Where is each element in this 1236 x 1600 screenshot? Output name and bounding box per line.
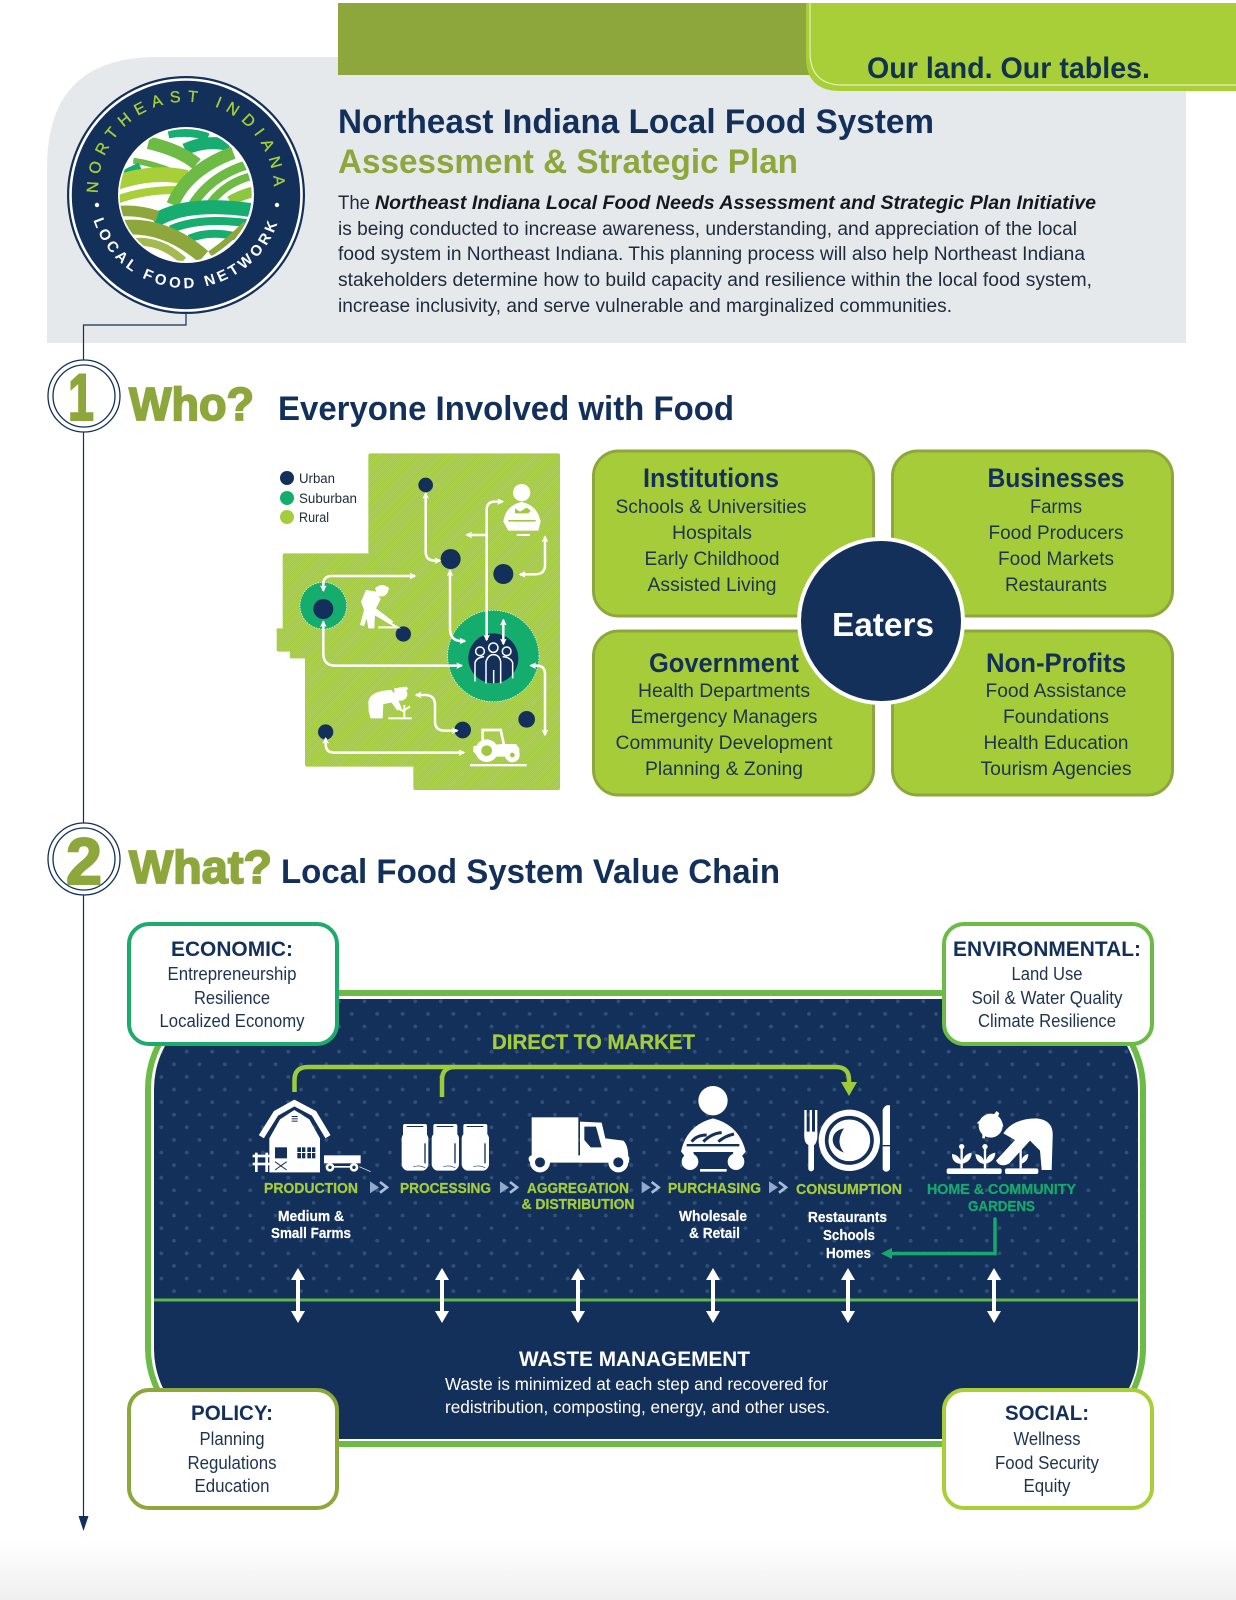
- icon: person with basket: [503, 484, 541, 536]
- legend: Suburban: [299, 491, 357, 506]
- panel: businesses: Food Markets: [998, 549, 1114, 570]
- waste management text: Waste is minimized at each step and recovered for: [445, 1374, 828, 1394]
- callout: social: SOCIAL:: [1005, 1402, 1089, 1425]
- panel: government: Planning & Zoning: [645, 759, 803, 780]
- waste management text: [445, 1348, 830, 1417]
- section 1 number: 1: [68, 360, 94, 434]
- title: Assessment & Strategic Plan: [338, 143, 798, 181]
- icon: jars: [402, 1124, 489, 1171]
- callout: policy: Planning: [200, 1429, 264, 1449]
- intro text: [338, 193, 1096, 317]
- flow arrows: [323, 493, 545, 753]
- step: aggregation label: & DISTRIBUTION: [522, 1197, 634, 1213]
- panel: non-profits: Health Education: [984, 733, 1128, 754]
- direct to market arrow: [294, 1067, 857, 1097]
- section 1 heading: Everyone Involved with Food: [278, 390, 734, 428]
- panel: non-profits: Non-Profits: [986, 648, 1126, 678]
- step: production labels: Small Farms: [271, 1226, 351, 1242]
- panel: government: Government: [649, 648, 799, 678]
- step: consumption labels: CONSUMPTION: [796, 1182, 902, 1198]
- step: consumption labels: Homes: [826, 1246, 871, 1262]
- timeline line: [84, 314, 186, 1520]
- urban dots: [313, 478, 535, 740]
- section 2 heading: [129, 841, 780, 893]
- panel: businesses: Restaurants: [1005, 575, 1107, 596]
- step: aggregation label: AGGREGATION: [527, 1181, 629, 1197]
- panel: non-profits: Foundations: [1003, 707, 1109, 728]
- callout: environmental: Land Use: [1012, 964, 1082, 984]
- step: processing label: PROCESSING: [400, 1181, 491, 1197]
- title: Northeast Indiana Local Food System: [338, 103, 934, 141]
- icon: plate and cutlery: [804, 1105, 890, 1172]
- callout: economic: Localized Economy: [160, 1011, 304, 1031]
- step: production labels: PRODUCTION: [264, 1181, 358, 1197]
- logo ring text: NORTHEAST INDIANA: [86, 90, 285, 192]
- panel: government: Emergency Managers: [630, 707, 818, 728]
- callout: policy: Education: [194, 1476, 270, 1496]
- timeline arrowhead: [78, 1516, 88, 1531]
- step: home and community gardens label: [927, 1182, 1076, 1215]
- arrow: gardens to homes: [881, 1219, 995, 1259]
- eaters circle: [797, 537, 965, 705]
- step: production labels: Medium &: [278, 1209, 345, 1225]
- section 2 number: [48, 823, 120, 898]
- panel: non-profits: [892, 631, 1172, 795]
- section 1 number: [48, 360, 120, 434]
- callout: social: Equity: [1024, 1476, 1070, 1496]
- panel: institutions: Institutions: [643, 463, 779, 493]
- tagline tab: [806, 3, 1236, 91]
- panel: value chain: [148, 993, 1143, 1444]
- tagline tab: Our land. Our tables.: [867, 52, 1150, 85]
- intro text: stakeholders determine how to build capacity and resilience within the local food system,: [338, 270, 1092, 291]
- eaters circle: Eaters: [832, 606, 934, 643]
- section 1 heading: [129, 378, 734, 430]
- regional map: [277, 453, 560, 790]
- logo ring text: [86, 90, 285, 288]
- legend: [280, 471, 357, 525]
- step: purchasing labels: Wholesale: [679, 1209, 747, 1225]
- header olive bar: [338, 3, 818, 75]
- callout: economic: Entrepreneurship: [168, 964, 296, 984]
- waste management text: redistribution, composting, energy, and other uses.: [445, 1397, 830, 1417]
- stakeholder groups: [594, 451, 1172, 795]
- section 1 heading: Who?: [129, 378, 254, 430]
- callout: social: [944, 1390, 1152, 1508]
- section 2 heading: Local Food System Value Chain: [281, 853, 780, 891]
- section 2 heading: What?: [129, 841, 272, 893]
- step: purchasing labels: PURCHASING: [668, 1181, 761, 1197]
- arrows: links to waste management: [291, 1268, 1001, 1323]
- step: purchasing labels: [668, 1181, 761, 1242]
- logo: [67, 76, 305, 314]
- panel: institutions: Assisted Living: [648, 575, 776, 596]
- legend: Urban: [299, 471, 335, 486]
- suburban circles: [300, 582, 539, 702]
- panel: institutions: Schools & Universities: [616, 497, 806, 518]
- chain step chevrons: [370, 1181, 786, 1193]
- intro text: The: [338, 193, 370, 214]
- callout: social: Food Security: [995, 1453, 1099, 1473]
- callout: economic: Resilience: [194, 988, 270, 1008]
- panel: non-profits: Food Assistance: [986, 681, 1126, 702]
- panel: institutions: Hospitals: [672, 523, 752, 544]
- callout: environmental: Soil & Water Quality: [972, 988, 1122, 1008]
- icon: bending gardener: [368, 687, 412, 719]
- intro text: is being conducted to increase awareness, understanding, and appreciation of the local: [338, 219, 1077, 240]
- callout: policy: POLICY:: [191, 1402, 273, 1425]
- logo fields: [117, 132, 255, 261]
- callout: environmental: ENVIRONMENTAL:: [953, 938, 1141, 961]
- legend: Rural: [299, 510, 329, 525]
- header panel: [47, 3, 1236, 343]
- panel: businesses: Businesses: [988, 463, 1124, 493]
- panel: institutions: Early Childhood: [644, 549, 780, 570]
- step: consumption labels: Schools: [823, 1228, 875, 1244]
- step: consumption labels: Restaurants: [808, 1210, 887, 1226]
- title: [338, 103, 934, 181]
- icon: delivery truck: [529, 1117, 629, 1172]
- callout: environmental: [944, 924, 1152, 1044]
- panel: government: [594, 631, 874, 795]
- step: aggregation label: [522, 1181, 634, 1213]
- intro text: Northeast Indiana Local Food Needs Assessment and Strategic Plan Initiative: [375, 193, 1096, 214]
- icon: shopper with basket: [681, 1086, 746, 1172]
- step: home and community gardens label: GARDENS: [968, 1199, 1035, 1215]
- icon: barn and wagon: [253, 1103, 371, 1172]
- intro text: food system in Northeast Indiana. This planning process will also help Northeast Indiana: [338, 244, 1085, 265]
- panel: businesses: Food Producers: [988, 523, 1124, 544]
- callout: economic: ECONOMIC:: [171, 938, 293, 961]
- panel: businesses: Farms: [1030, 497, 1082, 518]
- panel: institutions: [594, 451, 874, 616]
- callout: economic: [129, 924, 337, 1044]
- panel: non-profits: Tourism Agencies: [980, 759, 1132, 780]
- panel: government: Community Development: [616, 733, 833, 754]
- icon: home gardener: [947, 1111, 1053, 1174]
- waste management text: WASTE MANAGEMENT: [519, 1348, 750, 1371]
- icon: farmer with hoe: [360, 585, 397, 628]
- intro text: increase inclusivity, and serve vulnerable and marginalized communities.: [338, 296, 952, 317]
- panel: government: Health Departments: [638, 681, 810, 702]
- icon: people group: [475, 643, 513, 683]
- step: home and community gardens label: HOME & COMMUNITY: [927, 1182, 1076, 1198]
- step: consumption labels: [796, 1182, 902, 1262]
- step: production labels: [264, 1181, 358, 1242]
- callout: policy: [129, 1390, 337, 1508]
- section 2 number: 2: [66, 824, 102, 898]
- callout: social: Wellness: [1014, 1429, 1080, 1449]
- direct to market label: DIRECT TO MARKET: [492, 1031, 695, 1054]
- logo ring text: LOCAL FOOD NETWORK: [94, 217, 278, 288]
- callout: policy: Regulations: [188, 1453, 276, 1473]
- panel: businesses: [892, 451, 1172, 616]
- step: purchasing labels: & Retail: [689, 1226, 740, 1242]
- icon: tractor: [470, 730, 527, 766]
- callout: environmental: Climate Resilience: [978, 1011, 1116, 1031]
